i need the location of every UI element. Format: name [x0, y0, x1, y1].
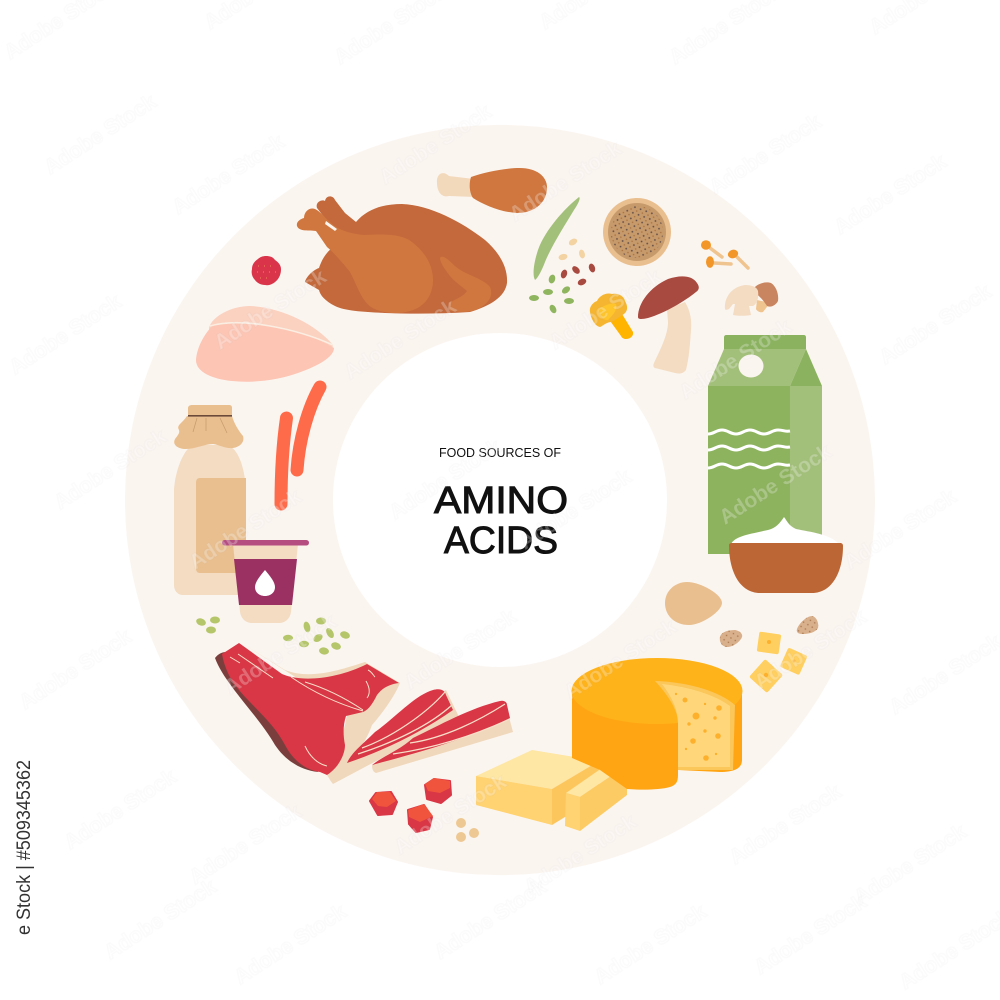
title: acids: ACIDS — [444, 520, 558, 562]
icon: mixed beans — [529, 237, 596, 314]
watermark: repeating stock text: Adobe Stock — [705, 110, 826, 199]
watermark: repeating stock text: Adobe Stock — [850, 820, 971, 909]
slice two — [372, 702, 513, 773]
icon: milk carton — [708, 335, 822, 554]
seeds: tan dots — [456, 818, 479, 842]
icon: milk drop — [255, 570, 275, 596]
watermark: repeating stock text: Adobe Stock — [210, 265, 331, 354]
watermark: repeating stock text: Adobe Stock — [875, 280, 996, 369]
watermark: repeating stock text: Adobe Stock — [15, 625, 136, 714]
icon: yogurt cup — [222, 540, 309, 623]
carton: wave lines — [708, 430, 790, 468]
icon: raspberry — [252, 256, 281, 285]
title: eyebrow: FOOD SOURCES OF — [439, 445, 561, 460]
watermark: repeating stock text: Adobe Stock — [375, 100, 496, 189]
icon: steak with slices — [215, 642, 513, 784]
steak: fat edge — [240, 642, 400, 783]
icon: meat cubes — [370, 778, 451, 832]
watermark: repeating stock text: Adobe Stock — [400, 605, 521, 694]
icon: bowl of cream — [729, 517, 843, 593]
icon: cheese cubes — [749, 632, 808, 693]
icon: orange mushrooms — [701, 240, 748, 268]
icon: button mushrooms — [725, 282, 778, 316]
watermark: repeating stock text: Adobe Stock — [560, 615, 681, 704]
background ring — [125, 125, 875, 875]
watermark: repeating stock text: Adobe Stock — [185, 800, 306, 889]
icon: cauliflower floret — [590, 293, 633, 339]
icon: egg — [665, 582, 722, 625]
watermark: repeating stock text: Adobe Stock — [230, 900, 351, 989]
watermark: repeating stock text: Adobe Stock — [750, 890, 871, 979]
watermark: repeating stock text: Adobe Stock — [725, 780, 846, 869]
watermark: repeating stock text: Adobe Stock — [100, 875, 221, 964]
watermark: repeating stock text: Adobe Stock — [430, 875, 551, 964]
watermark: repeating stock text: Adobe Stock — [40, 90, 161, 179]
watermark: repeating stock text: Adobe Stock — [185, 485, 306, 574]
watermark: repeating stock text: Adobe Stock — [545, 265, 666, 354]
stock id caption: e Stock | #509345362 — [14, 760, 35, 935]
title — [434, 445, 568, 562]
watermark: repeating stock text: Adobe Stock — [590, 900, 711, 989]
icon: sausages — [281, 387, 320, 504]
watermark: repeating stock text: Adobe Stock — [715, 440, 836, 529]
watermark: repeating stock text: Adobe Stock — [5, 290, 126, 379]
watermark: repeating stock text: Adobe Stock — [220, 610, 341, 699]
icon: chicken breast — [196, 306, 334, 382]
watermark: repeating stock text: Adobe Stock — [505, 137, 626, 226]
icon: cheese wheel — [572, 658, 742, 790]
icon: butter block — [476, 750, 627, 831]
icon: round seed bowl — [603, 198, 671, 266]
icon: speckled nuts — [720, 616, 818, 647]
icon: roast turkey — [297, 196, 507, 314]
icon: porcini mushroom — [638, 276, 699, 374]
watermark: repeating stock text: Adobe Stock — [60, 765, 181, 854]
watermark: repeating stock text: Adobe Stock — [750, 605, 871, 694]
steak: red meat — [222, 643, 399, 775]
icon: chicken drumstick — [437, 168, 547, 213]
watermark: repeating stock text: Adobe Stock — [515, 465, 636, 554]
watermark: repeating stock text: Adobe Stock — [830, 150, 951, 239]
watermark: repeating stock text: Adobe Stock — [840, 485, 961, 574]
watermark: repeating stock text: Adobe Stock — [520, 810, 641, 899]
seeds: large green group — [283, 618, 351, 655]
watermark: repeating stock text: Adobe Stock — [675, 315, 796, 404]
watermark: repeating stock text: Adobe Stock — [168, 130, 289, 219]
icon: milk bottle — [174, 405, 246, 595]
icon: green bean — [534, 197, 580, 280]
watermark: repeating stock text: Adobe Stock — [50, 425, 171, 514]
steak: rind — [215, 652, 318, 772]
seeds: small green group — [195, 616, 220, 634]
title: amino: AMINO — [434, 480, 568, 522]
watermark: repeating stock text: Adobe Stock — [340, 295, 461, 384]
watermark: repeating stock text: Adobe Stock — [385, 435, 506, 524]
watermark: repeating stock text: Adobe Stock — [390, 770, 511, 859]
slice one — [327, 690, 459, 784]
